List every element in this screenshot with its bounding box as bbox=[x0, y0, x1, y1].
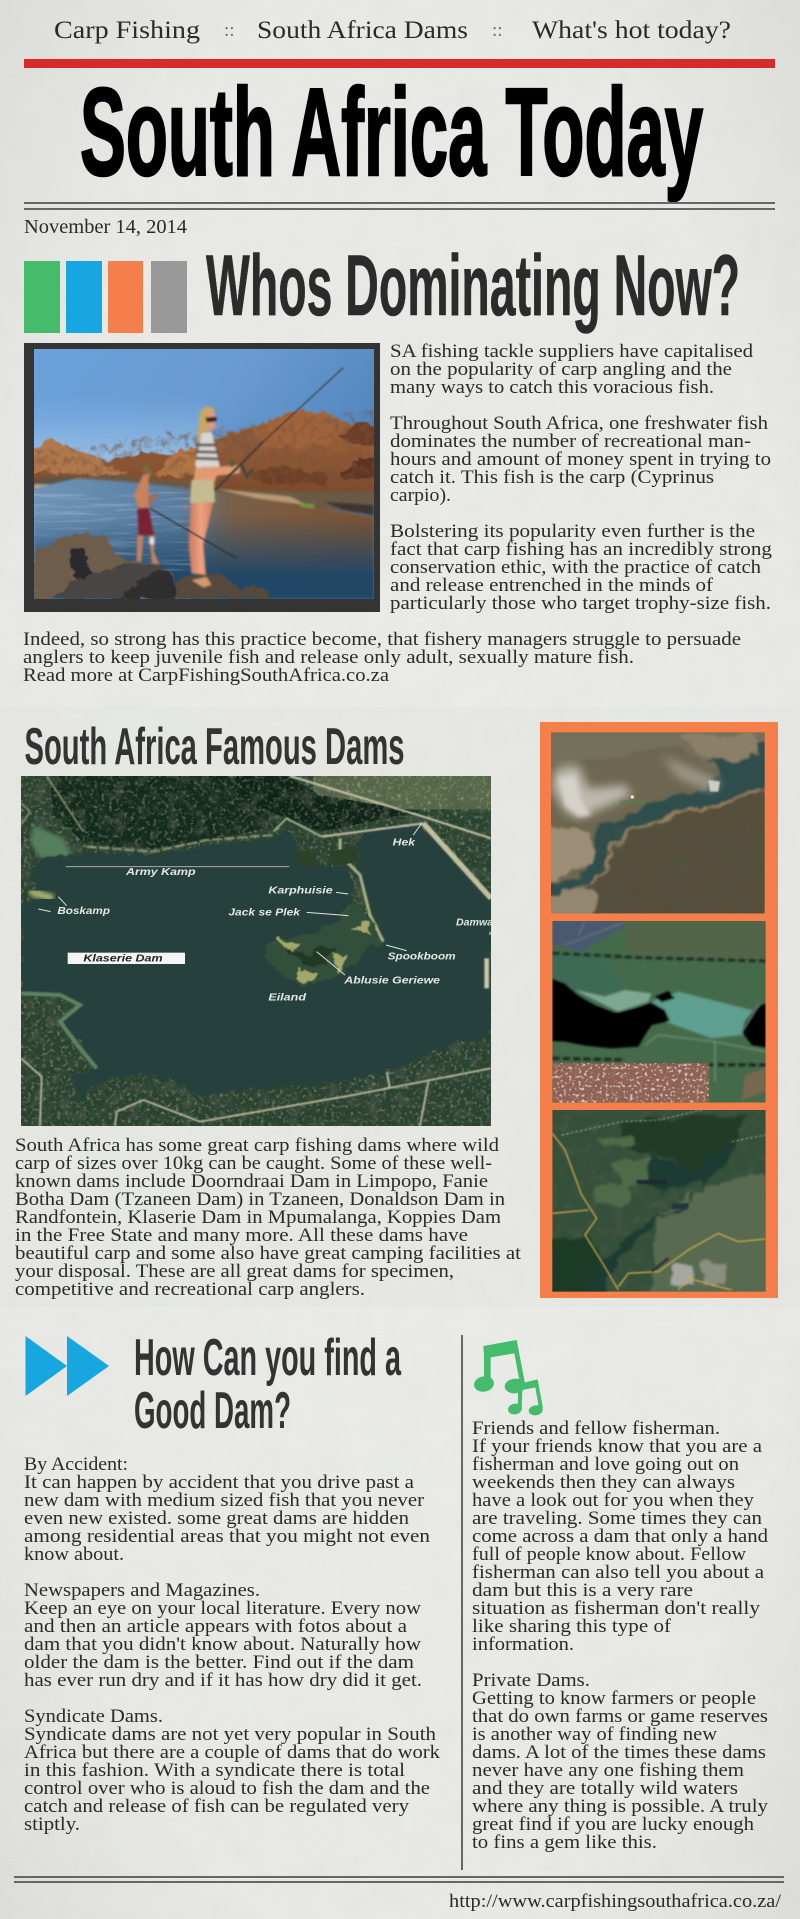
text block: famous dams: beautiful carp and some also have great camping facilities at bbox=[15, 1243, 522, 1264]
text block: famous dams: Randfontein, Klaserie Dam in Mpumalanga, Koppies Dam bbox=[15, 1207, 501, 1228]
text block: famous dams: Botha Dam (Tzaneen Dam) in Tzaneen, Donaldson Dam in bbox=[15, 1189, 506, 1210]
text block: famous dams: South Africa has some great carp fishing dams where wild bbox=[15, 1135, 500, 1156]
heading: how can you find a good dam: How Can you find a bbox=[134, 1329, 402, 1387]
text block: intro: on the popularity of carp angling and the bbox=[390, 359, 732, 380]
text block: intro: hours and amount of money spent in trying to bbox=[390, 449, 771, 470]
text block: intro: Bolstering its popularity even further is the bbox=[390, 521, 755, 542]
text block: intro continued: Read more at CarpFishingSouthAfrica.co.za bbox=[23, 665, 390, 686]
map labels: Ablusie Geriewe bbox=[343, 976, 441, 987]
text block: left column: Keep an eye on your local literature. Every now bbox=[24, 1598, 421, 1619]
text block: right column: Private Dams. bbox=[472, 1670, 590, 1691]
text block: left column: Newspapers and Magazines. bbox=[24, 1580, 260, 1601]
text block: intro continued bbox=[23, 629, 741, 686]
text block: left column: and then an article appears with fotos about a bbox=[24, 1616, 408, 1637]
text block: intro: many ways to catch this voracious fish. bbox=[390, 377, 714, 398]
heading: how can you find a good dam bbox=[134, 1329, 402, 1440]
text block: right column: great find if you are lucky enough bbox=[472, 1814, 755, 1835]
man bbox=[134, 464, 159, 564]
text block: right column: weekends then they can always bbox=[472, 1472, 735, 1493]
top navigation: What's hot today? bbox=[532, 17, 731, 44]
text block: right column: is another way of finding new bbox=[472, 1724, 717, 1745]
fishing rods bbox=[150, 368, 343, 558]
map labels bbox=[57, 838, 496, 1003]
text block: right column: come across a dam that only a hand bbox=[472, 1526, 769, 1547]
icon: music notes bbox=[473, 1340, 543, 1416]
text block: right column: information. bbox=[472, 1634, 574, 1655]
top navigation: :: bbox=[224, 20, 235, 41]
text block: famous dams: in the Free State and many more. All these dams have bbox=[15, 1225, 468, 1246]
text block: right column: dams. A lot of the times these dams bbox=[472, 1742, 766, 1763]
top navigation: Carp Fishing bbox=[54, 17, 201, 44]
text block: left column: catch and release of fish can be regulated very bbox=[24, 1796, 410, 1817]
text block: famous dams: competitive and recreational carp anglers. bbox=[15, 1279, 365, 1300]
text block: famous dams bbox=[15, 1135, 522, 1300]
text block: right column: Getting to know farmers or people bbox=[472, 1688, 756, 1709]
top navigation bbox=[54, 17, 731, 44]
text block: right column bbox=[472, 1418, 769, 1853]
text block: left column: older the dam is the better. Find out if the dam bbox=[24, 1652, 414, 1673]
text block: right column: situation as fisherman don't really bbox=[472, 1598, 761, 1619]
text block: left column: dam that you didn't know about. Naturally how bbox=[24, 1634, 421, 1655]
text block: left column: know about. bbox=[24, 1544, 124, 1565]
map labels: Army Kamp bbox=[125, 867, 196, 878]
text block: left column: even new existed. some great dams are hidden bbox=[24, 1508, 410, 1529]
text block: intro: catch it. This fish is the carp (Cyprinus bbox=[390, 467, 714, 488]
map labels: Karphuisie bbox=[268, 886, 333, 897]
island bbox=[265, 902, 383, 983]
text block: right column: full of people know about. Fellow bbox=[472, 1544, 746, 1565]
lake water bbox=[21, 825, 491, 1098]
footer url: http://www.carpfishingsouthafrica.co.za/ bbox=[449, 1891, 782, 1912]
text block: intro: fact that carp fishing has an incredibly strong bbox=[390, 539, 773, 560]
text block: intro continued: anglers to keep juvenile fish and release only adult, sexually mature fish. bbox=[23, 647, 634, 668]
text block: intro: SA fishing tackle suppliers have capitalised bbox=[390, 341, 754, 362]
text block: left column: Africa but there are a couple of dams that do work bbox=[24, 1742, 441, 1763]
text block: right column: Friends and fellow fisherman. bbox=[472, 1418, 720, 1439]
text block: right column: dam but this is a very rare bbox=[472, 1580, 693, 1601]
text block: right column: If your friends know that you are a bbox=[472, 1436, 763, 1457]
text block: right column: and they are totally wild waters bbox=[472, 1778, 738, 1799]
text block: left column: control over who is aloud to fish the dam and the bbox=[24, 1778, 430, 1799]
text block: left column: in this fashion. With a syndicate there is total bbox=[24, 1760, 405, 1781]
text block: left column: Syndicate Dams. bbox=[24, 1706, 163, 1727]
map labels: Eiland bbox=[268, 992, 307, 1003]
text block: famous dams: known dams include Doorndraai Dam in Limpopo, Fanie bbox=[15, 1171, 488, 1192]
map: Klaserie Dam aerial bbox=[21, 776, 496, 1126]
date: November 14, 2014 bbox=[24, 216, 187, 238]
text block: intro: carpio). bbox=[390, 485, 451, 506]
text block: famous dams: carp of sizes over 10kg can be caught. Some of these well- bbox=[15, 1153, 492, 1174]
text block: left column: among residential areas that you might not even bbox=[24, 1526, 431, 1547]
text block: left column: new dam with medium sized fish that you never bbox=[24, 1490, 425, 1511]
bottom double rule bbox=[14, 1876, 784, 1883]
text block: right column: never have any one fishing them bbox=[472, 1760, 744, 1781]
heading: famous dams: South Africa Famous Dams bbox=[24, 718, 404, 776]
red rule bbox=[24, 59, 775, 68]
text block: intro: dominates the number of recreational man- bbox=[390, 431, 751, 452]
icon: four colour bars bbox=[24, 261, 187, 333]
satellite image 2 bbox=[552, 921, 766, 1103]
text block: left column: has ever run dry and if it has how dry did it get. bbox=[24, 1670, 422, 1691]
map labels: Klaserie Dam bbox=[83, 954, 163, 965]
map labels: Hek bbox=[393, 838, 416, 849]
text block: intro: Throughout South Africa, one freshwater fish bbox=[390, 413, 769, 434]
text block: right column: like sharing this type of bbox=[472, 1616, 672, 1637]
text block: right column: fisherman and love going out on bbox=[472, 1454, 740, 1475]
text block: intro bbox=[390, 341, 773, 614]
text block: intro continued: Indeed, so strong has this practice become, that fishery managers struggle to persuade bbox=[23, 629, 741, 650]
mountains bbox=[30, 409, 380, 502]
rocks bbox=[34, 534, 272, 599]
satellite image 1 bbox=[551, 732, 765, 914]
panel: orange satellite strip bbox=[540, 722, 778, 1305]
text block: intro: particularly those who target trophy-size fish. bbox=[390, 593, 771, 614]
shore and water bbox=[34, 476, 374, 599]
text block: right column: fisherman can also tell you about a bbox=[472, 1562, 765, 1583]
top navigation: :: bbox=[492, 20, 503, 41]
text block: left column bbox=[24, 1454, 441, 1835]
text block: right column: are traveling. Some times they can bbox=[472, 1508, 763, 1529]
map labels: Damwal bbox=[456, 918, 496, 929]
woman bbox=[189, 406, 240, 588]
text block: right column: that do own farms or game reserves bbox=[472, 1706, 768, 1727]
top navigation: South Africa Dams bbox=[257, 17, 468, 44]
map labels: Spookboom bbox=[388, 951, 456, 962]
double rule bbox=[24, 202, 775, 210]
text block: left column: Syndicate dams are not yet very popular in South bbox=[24, 1724, 437, 1745]
map labels: Jack se Plek bbox=[228, 908, 301, 919]
text block: right column: where any thing is possible. A truly bbox=[472, 1796, 769, 1817]
column divider bbox=[461, 1335, 463, 1870]
map labels: Boskamp bbox=[57, 906, 110, 917]
text block: famous dams: your disposal. These are all great dams for specimen, bbox=[15, 1261, 454, 1282]
text block: left column: It can happen by accident that you drive past a bbox=[24, 1472, 415, 1493]
satellite image 3 bbox=[552, 1110, 766, 1292]
icon: double arrow bbox=[26, 1336, 109, 1396]
text block: intro: conservation ethic, with the practice of catch bbox=[390, 557, 762, 578]
text block: left column: stiptly. bbox=[24, 1814, 80, 1835]
text block: left column: By Accident: bbox=[24, 1454, 128, 1475]
heading: how can you find a good dam: Good Dam? bbox=[134, 1382, 291, 1440]
text block: right column: to fins a gem like this. bbox=[472, 1832, 657, 1853]
text block: intro: and release entrenched in the minds of bbox=[390, 575, 714, 596]
text block: right column: have a look out for you when they bbox=[472, 1490, 755, 1511]
photo: two people fishing on a river bbox=[24, 343, 380, 612]
